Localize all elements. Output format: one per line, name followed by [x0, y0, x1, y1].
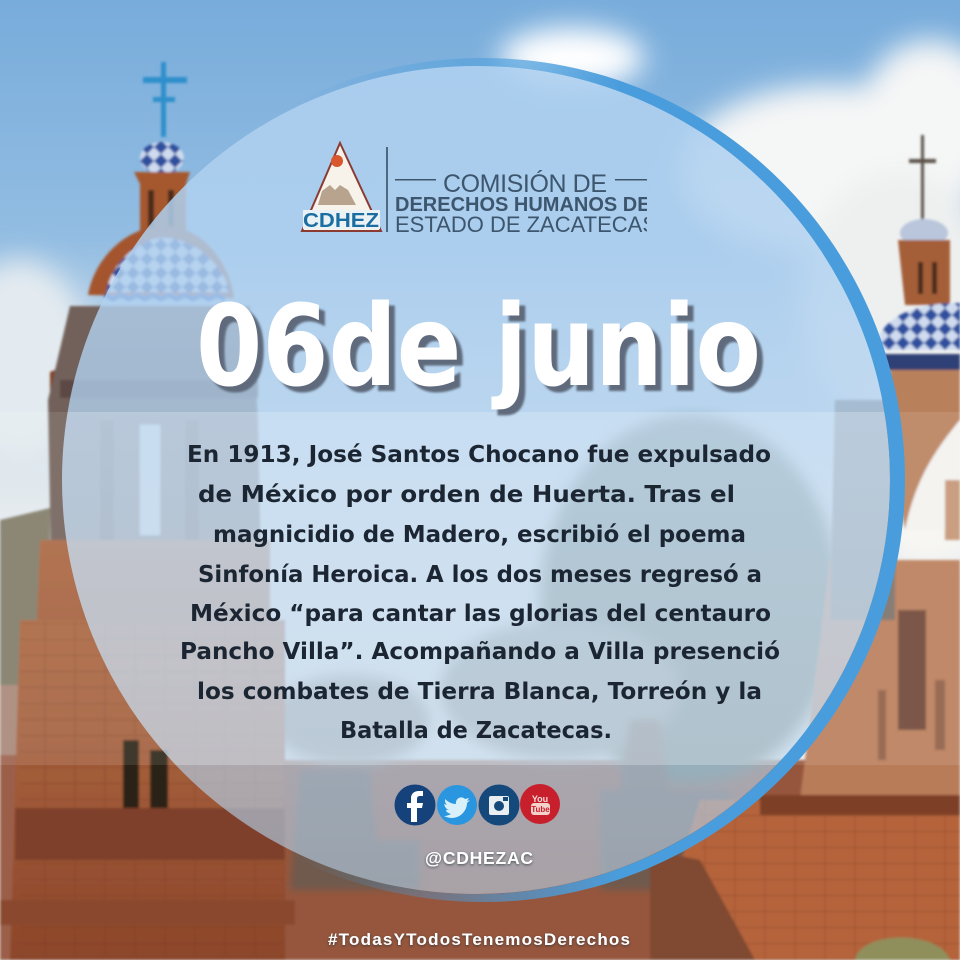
- clouds: [0, 28, 960, 570]
- icon: instagram: [478, 784, 520, 826]
- right cross: [909, 135, 936, 225]
- body paragraph: México “para cantar las glorias del centauro: [190, 599, 771, 627]
- body paragraph: Sinfonía Heroica. A los dos meses regresó a: [198, 560, 762, 588]
- body paragraph: [180, 440, 780, 744]
- town spires: [290, 720, 730, 890]
- blue crescent ring: [61, 58, 905, 902]
- left tower: [0, 62, 295, 960]
- band inside circle: [62, 412, 890, 765]
- body paragraph: Pancho Villa”. Acompañando a Villa presenció: [180, 637, 780, 665]
- icon: youtube: [520, 784, 560, 824]
- social media icons: [394, 784, 560, 826]
- date title: 06de junio: [196, 282, 761, 412]
- date title: 06de junio: [202, 288, 767, 418]
- body paragraph: En 1913, José Santos Chocano fue expulsado: [187, 440, 771, 468]
- body paragraph: magnicidio de Madero, escribió el poema: [213, 520, 746, 548]
- logo wordmark: ESTADO DE ZACATECAS: [395, 212, 657, 237]
- body paragraph: Batalla de Zacatecas.: [340, 716, 612, 744]
- brick wall lower right: [650, 800, 960, 960]
- right tower: [800, 135, 960, 800]
- icon: youtube: You: [532, 794, 548, 804]
- icon: facebook: [394, 784, 436, 826]
- translucent white band: [0, 412, 960, 765]
- logo wordmark: DERECHOS HUMANOS DEL: [395, 194, 663, 216]
- cross: [143, 62, 187, 137]
- hashtag: #TodasYTodosTenemosDerechos: [328, 930, 630, 949]
- logo triangle emblem: [302, 143, 381, 232]
- social handle: @CDHEZAC: [425, 848, 533, 868]
- logo: [302, 143, 663, 237]
- translucent circle panel: [62, 66, 890, 894]
- logo divider: [386, 147, 388, 232]
- body paragraph: los combates de Tierra Blanca, Torreón y la: [197, 677, 762, 705]
- icon: twitter: [437, 785, 477, 825]
- logo wordmark: [395, 170, 647, 232]
- tiled dome: [106, 238, 230, 292]
- icon: youtube: Tube: [531, 805, 550, 814]
- logo wordmark: COMISIÓN DE: [443, 169, 607, 198]
- distant hillside and town: [270, 415, 840, 785]
- logo triangle emblem: CDHEZ: [303, 210, 379, 232]
- body paragraph: de México por orden de Huerta. Tras el: [198, 480, 735, 508]
